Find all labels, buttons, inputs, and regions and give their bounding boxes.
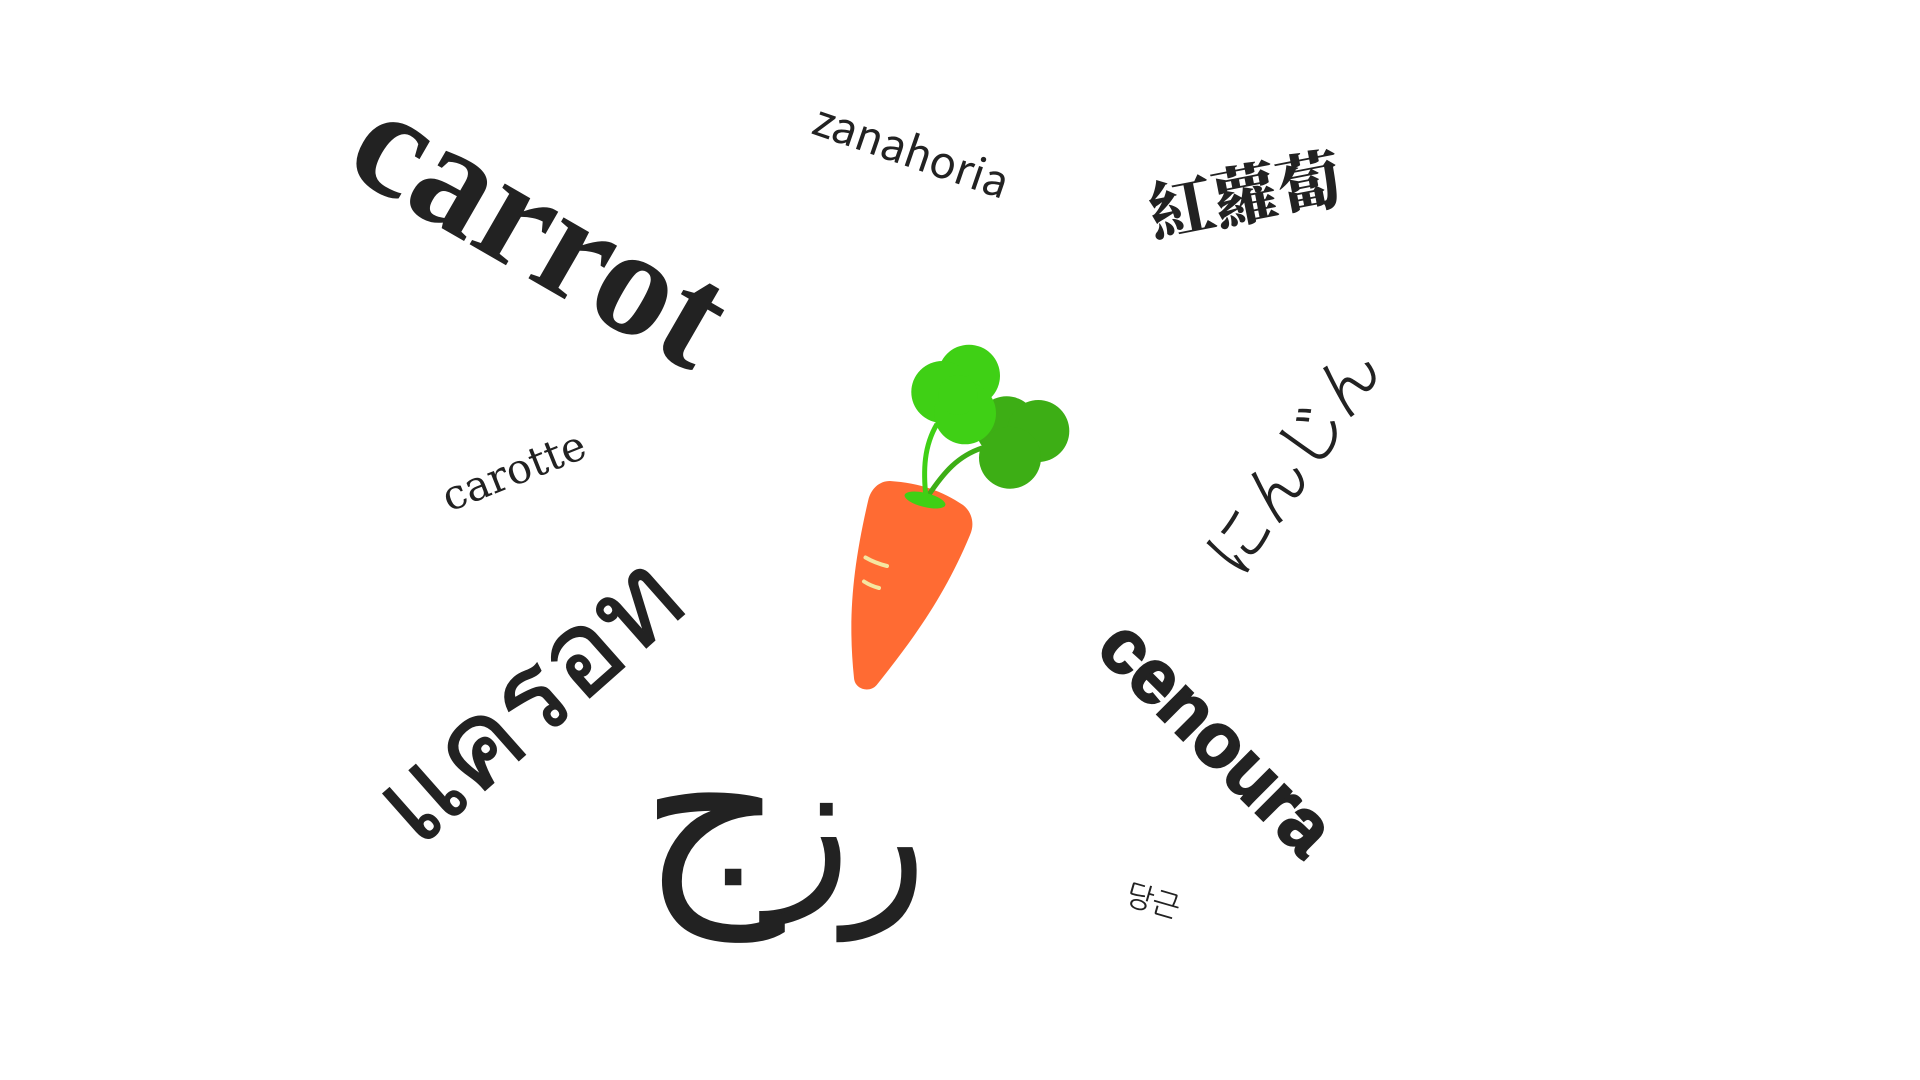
word: English carrot: carrot — [324, 53, 759, 402]
icon: carrot illustration — [851, 345, 1069, 689]
stem: dark — [928, 448, 982, 496]
word: Portuguese cenoura: cenoura — [1082, 603, 1352, 873]
carrot highlights — [864, 558, 887, 588]
word: French carotte: carotte — [435, 420, 593, 521]
word: Korean: 당근 — [1122, 879, 1183, 925]
word: Traditional Chinese: 紅蘿蔔 — [1143, 144, 1348, 252]
word: Spanish zanahoria: zanahoria — [806, 85, 1019, 212]
word: Thai: แครอท — [348, 529, 707, 869]
word: Arabic: ز — [758, 723, 851, 927]
carrot top ellipse — [903, 488, 947, 512]
word: Arabic: ر — [836, 726, 927, 943]
leaves: dark — [976, 396, 1069, 489]
stem: light — [925, 424, 937, 498]
leaves: light — [911, 345, 1000, 444]
word: Arabic: ج — [640, 680, 786, 943]
carrot body — [851, 481, 972, 689]
word: Japanese: にんじん — [1179, 327, 1399, 591]
word: Arabic — [640, 680, 927, 943]
